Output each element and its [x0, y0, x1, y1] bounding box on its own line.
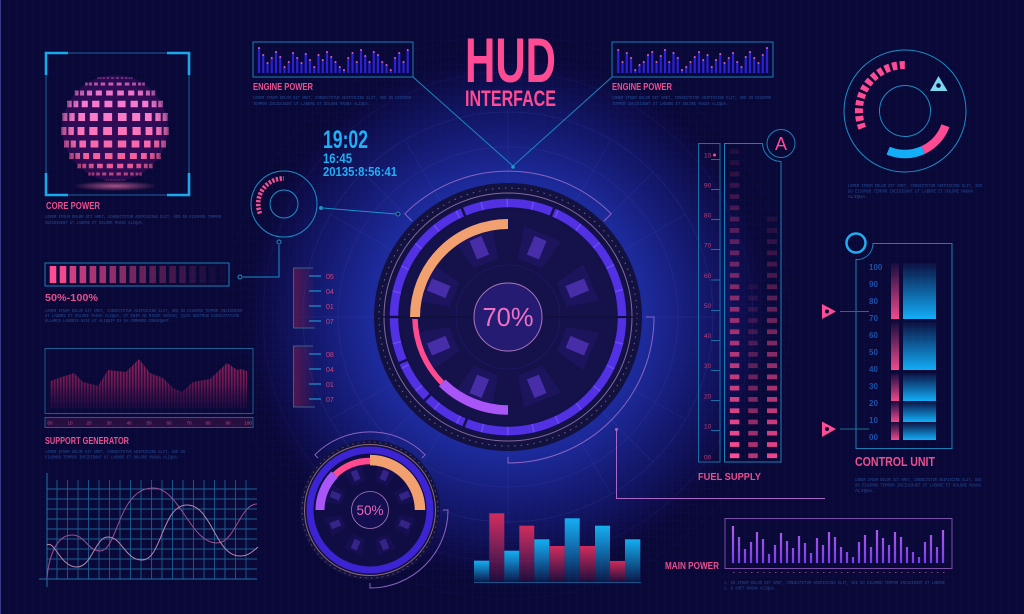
fuel supply scale: 20 [704, 394, 712, 400]
text block: left engine: LOREM IPSUM DOLOR SIT AMET, CONSECTETUR ADIPISCING ELIT, SED DO EIUSMOD [253, 96, 411, 101]
connector lines to gauge [413, 77, 612, 169]
clock readouts: 19:02 [323, 126, 368, 154]
text block: support generator: LOREM IPSUM DOLOR SIT AMET, CONSECTETUR ADIPISCING ELIT, SED DO [45, 450, 185, 455]
panel: right engine power chart [612, 42, 773, 77]
control unit panel [846, 234, 952, 448]
main gauge 70% [374, 183, 642, 451]
center readout small: 50% [356, 503, 384, 518]
orange arc [415, 224, 508, 317]
fuel supply columns [724, 144, 781, 462]
fuel supply scale [698, 144, 720, 462]
area chart axis: 30 [106, 420, 112, 426]
text block: core power: INCIDIDUNT UT LABORE ET DOLORE MAGNA ALIQUA. [45, 221, 144, 226]
control scale labels: 90 [869, 280, 878, 289]
panel: left engine power chart [253, 42, 413, 77]
title [465, 26, 556, 111]
text block: core power [45, 215, 221, 226]
control level bars [891, 263, 936, 440]
blue segmented ring [388, 203, 628, 431]
icon: badge A: A [775, 134, 787, 154]
label: 50%-100%: 50%-100% [45, 293, 98, 304]
clock readouts: 20135:8:56:41 [323, 164, 397, 179]
text block: dial [848, 184, 982, 200]
fuel supply scale: 10 [704, 152, 712, 160]
control scale labels: 40 [869, 365, 878, 374]
scale panel: upper [294, 268, 334, 328]
control scale labels: 00 [869, 433, 878, 442]
area chart axis: 10 [67, 420, 73, 426]
inner disc with sectors [376, 210, 640, 424]
icon: badge A [767, 130, 795, 158]
area chart axis: 80 [205, 420, 211, 426]
dial tick arc [859, 65, 907, 128]
progress bar [45, 263, 229, 286]
text block: right engine: TEMPOR INCIDIDUNT UT LABORE ET DOLORE MAGNA ALIQUA. [612, 102, 728, 107]
icon: upper marker [822, 304, 869, 319]
control scale labels: 70 [869, 314, 878, 323]
heading: right engine power: ENGINE POWER [612, 81, 672, 93]
right dial [844, 50, 966, 172]
purple arc small [320, 475, 335, 510]
text block: right engine: LOREM IPSUM DOLOR SIT AMET, CONSECTETUR ADIPISCING ELIT, SED DO EIUSMOD [612, 96, 771, 101]
text block: control unit: DO EIUSMOD TEMPOR INCIDIDUNT UT LABORE ET DOLORE MAGNA [855, 484, 981, 488]
scale panel: lower: 04 [326, 367, 334, 374]
center readout: 70% [482, 304, 534, 332]
scale panel: lower [294, 346, 334, 407]
clock readouts [323, 126, 397, 179]
scale panel: upper: 04 [326, 289, 334, 296]
text block: right engine [612, 96, 771, 107]
fuel supply scale: 80 [704, 212, 712, 220]
main gauge brackets [405, 171, 654, 463]
text block: control unit [855, 478, 981, 494]
text block: progress: UT LABORE ET DOLORE MAGNA ALIQUA. UT ENIM AD MINIM VENIAM, QUIS NOSTRUD EXERCITATION [45, 314, 239, 319]
icon: dotted sphere [61, 74, 169, 182]
icon: triangle [930, 76, 948, 91]
title: INTERFACE [465, 86, 556, 111]
small gauge 50% [300, 440, 440, 580]
bar chart [474, 513, 641, 582]
control scale labels: 10 [869, 416, 878, 425]
heading: fuel supply: FUEL SUPPLY [698, 471, 761, 483]
area chart axis: 50 [146, 420, 152, 426]
icon: cyan ring [846, 234, 866, 252]
text block: progress [45, 309, 243, 324]
area chart axis: 20 [86, 420, 92, 426]
text block: support generator [45, 450, 185, 460]
pink arc [415, 319, 442, 383]
area chart [45, 348, 253, 414]
control scale labels: 100 [869, 263, 883, 272]
reflection glow [73, 181, 157, 191]
title: HUD [465, 26, 556, 96]
dial blue arc [888, 150, 923, 154]
text block: main power: 2. B AMET MAGNA ALIQUA. [724, 586, 776, 592]
center readout [474, 283, 542, 351]
control scale labels [869, 263, 883, 442]
text block: main power: 1. IN IPSUM DOLOR SIT AMET, CONSECTETUR ADIPISCING ELIT, SED DO EIUSMOD TEMPOR INCIDIDUNT UT LABORE [724, 581, 945, 586]
text block: control unit: ALIQUA. [855, 489, 875, 494]
scale panel: lower: 08 [326, 352, 334, 359]
area chart axis: 60 [166, 420, 172, 426]
area chart axis: 100 [244, 420, 252, 426]
dial pink arc [923, 126, 945, 150]
text block: progress: ULLAMCO LABORIS NISI UT ALIQUIP EX EA COMMODO CONSEQUAT. [45, 319, 171, 324]
radar grid background [226, 35, 790, 599]
icon: lower marker [822, 422, 869, 437]
small gauge brackets [315, 432, 448, 588]
control scale labels: 60 [869, 331, 878, 340]
text block: left engine: TEMPOR INCIDIDUNT UT LABORE ET DOLORE MAGNA ALIQUA. [253, 102, 370, 107]
heading: control unit: CONTROL UNIT [855, 454, 935, 469]
fuel supply scale: 40 [704, 333, 712, 340]
panel: main power chart [725, 518, 952, 572]
connector line: gauge to main power [615, 428, 825, 498]
fuel supply scale: 70 [704, 242, 712, 250]
text block: main power [724, 581, 945, 592]
line chart [39, 473, 258, 587]
purple arc [442, 383, 508, 410]
text block: dial: LOREM IPSUM DOLOR SIT AMET, CONSECTETUR ADIPISCING ELIT, SED [848, 184, 982, 189]
control scale labels: 80 [869, 297, 878, 306]
pink arc small [335, 461, 370, 475]
orange arc small [370, 460, 420, 510]
area chart axis: 40 [126, 420, 132, 426]
scale panel: lower: 01 [326, 382, 334, 389]
heading: left engine power: ENGINE POWER [253, 81, 313, 93]
text block: core power: LOREM IPSUM DOLOR SIT AMET, CONSECTETUR ADIPISCING ELIT, SED DO EIUSMOD TEMPOR [45, 215, 221, 220]
clock readouts: 16:45 [323, 150, 352, 166]
scale panel: upper: 07 [326, 319, 334, 326]
heading: support generator: SUPPORT GENERATOR [45, 435, 129, 447]
scale panel: lower: 07 [326, 397, 334, 404]
area chart axis: 90 [225, 420, 231, 426]
panel: core power [46, 53, 189, 195]
area chart axis [45, 418, 253, 428]
fuel supply scale: 30 [704, 363, 712, 370]
heading: core power: CORE POWER [46, 200, 100, 212]
text block: support generator: EIUSMOD TEMPOR INCIDIDUNT UT LABORE ET DOLORE MAGNA ALIQUA. [45, 456, 179, 460]
text block: control unit: LOREM IPSUM DOLOR SIT AMET, CONSECTETUR ADIPISCING ELIT, SED [855, 478, 981, 483]
scale panel: upper: 01 [326, 304, 334, 311]
fuel supply scale: 00 [704, 454, 712, 462]
fuel supply scale: 50 [704, 303, 712, 310]
small dial with connectors [238, 171, 400, 279]
text block: progress: LOREM IPSUM DOLOR SIT AMET, CONSECTETUR ADIPISCING ELIT, SED DO EIUSMOD TEMPOR INCIDIDUNT [45, 309, 243, 314]
fuel supply scale: 60 [704, 273, 712, 280]
text block: dial: ALIQUA. [848, 195, 868, 200]
control scale labels: 50 [869, 348, 878, 357]
control scale labels: 20 [869, 399, 878, 408]
fuel supply scale: 90 [704, 182, 712, 190]
fuel supply scale: 10 [704, 424, 712, 430]
control scale labels: 30 [869, 382, 878, 391]
area chart axis: 70 [186, 420, 192, 426]
text block: left engine [253, 96, 411, 107]
area chart axis: 00 [47, 420, 53, 426]
text block: dial: DO EIUSMOD TEMPOR INCIDIDUNT UT LABORE ET DOLORE MAGNA [848, 190, 973, 194]
scale panel: upper: 05 [326, 274, 334, 281]
heading: main power: MAIN POWER [665, 560, 719, 572]
